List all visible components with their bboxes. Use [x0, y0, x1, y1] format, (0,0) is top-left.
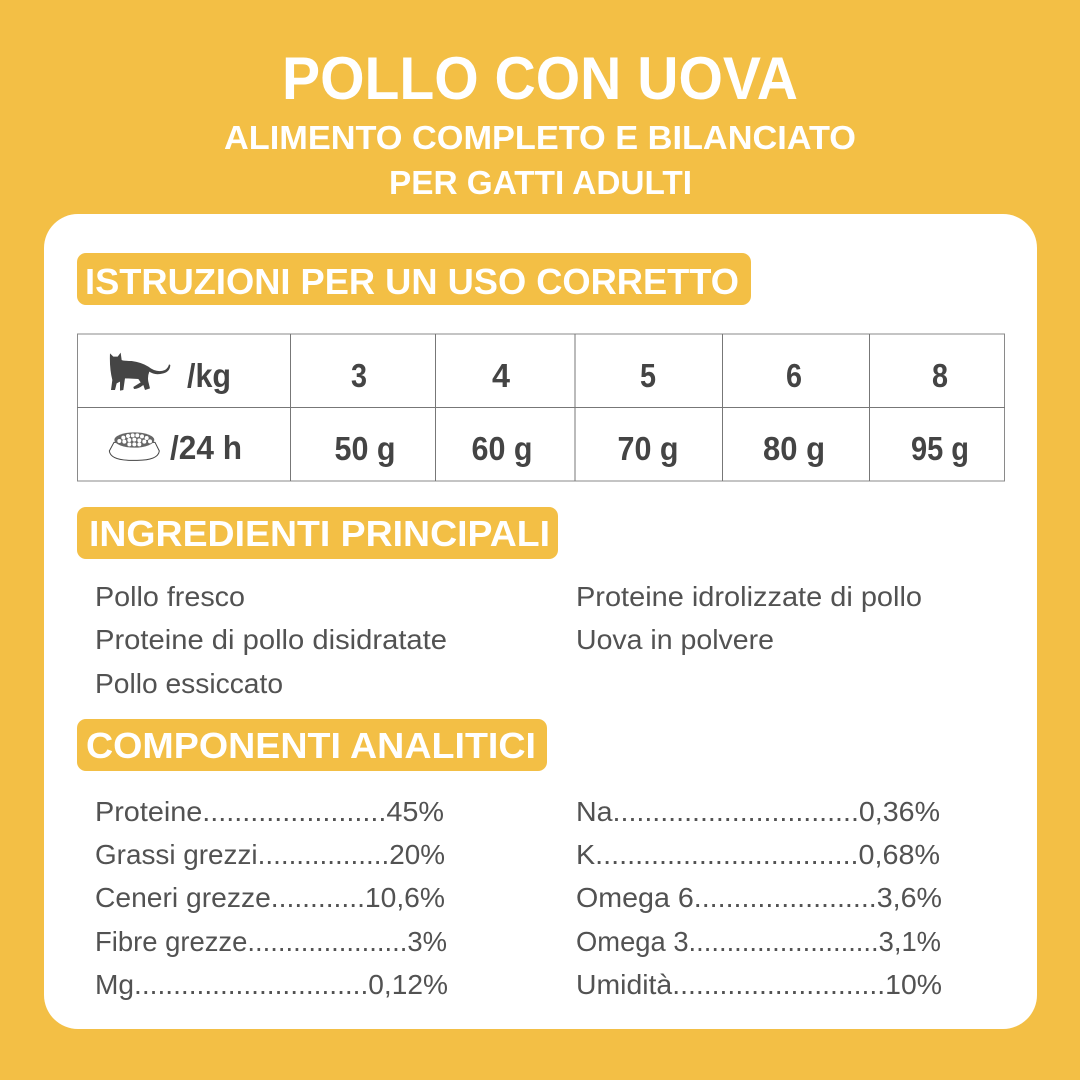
analytical values: left column: Proteine.......................45%	[95, 796, 444, 827]
heading: main ingredients: INGREDIENTI PRINCIPALI	[89, 513, 550, 554]
analytical values: left column: Fibre grezze.....................3%	[95, 926, 447, 957]
table row: weight values: 5	[640, 357, 656, 394]
table row: daily amounts: 60 g	[472, 430, 532, 467]
analytical values: left column: Mg..............................0,12%	[95, 969, 448, 1000]
table row: weight values: 3	[351, 357, 367, 394]
analytical values: right column: Umidità...........................10%	[576, 969, 942, 1000]
analytical values: left column: Ceneri grezze............10,6%	[95, 882, 445, 913]
ingredients list: Pollo essiccato	[95, 668, 283, 699]
ingredients list: Pollo fresco	[95, 581, 245, 612]
label: per 24 h: /24 h	[170, 429, 242, 466]
label: per kg: /kg	[187, 357, 231, 394]
table row: daily amounts: 80 g	[763, 430, 825, 467]
table row: daily amounts	[334, 430, 969, 467]
table row: daily amounts: 95 g	[911, 430, 969, 467]
subtitle	[224, 119, 856, 201]
table row: weight values: 8	[932, 357, 948, 394]
table row: daily amounts: 70 g	[618, 430, 678, 467]
icon: food bowl	[109, 432, 159, 460]
ingredients list	[95, 581, 922, 699]
analytical values: right column: Na...............................0,36%	[576, 796, 940, 827]
ingredients list: Proteine di pollo disidratate	[95, 624, 447, 655]
ingredients list: Proteine idrolizzate di pollo	[576, 581, 922, 612]
subtitle: ALIMENTO COMPLETO E BILANCIATO	[224, 119, 856, 156]
heading: instructions: ISTRUZIONI PER UN USO CORRETTO	[85, 261, 739, 302]
table row: daily amounts: 50 g	[334, 430, 396, 467]
table row: weight values: 4	[492, 357, 511, 394]
analytical values: right column: K.................................0,68%	[576, 839, 940, 870]
analytical values: right column: Omega 3.........................3,1%	[576, 926, 941, 957]
heading: analytical components: COMPONENTI ANALITICI	[86, 725, 536, 766]
analytical values: right column: Omega 6.......................3,6%	[576, 882, 942, 913]
analytical values: right column	[576, 796, 942, 1000]
panel: white card	[44, 214, 1037, 1029]
title: POLLO CON UOVA	[282, 45, 798, 112]
analytical values: left column: Grassi grezzi.................20%	[95, 839, 445, 870]
analytical values: left column	[95, 796, 448, 1000]
subtitle: PER GATTI ADULTI	[389, 164, 692, 201]
feeding table	[77, 334, 1005, 481]
icon: cat	[110, 353, 170, 391]
table row: weight values: 6	[786, 357, 802, 394]
ingredients list: Uova in polvere	[576, 624, 774, 655]
table row: weight values	[351, 357, 948, 394]
